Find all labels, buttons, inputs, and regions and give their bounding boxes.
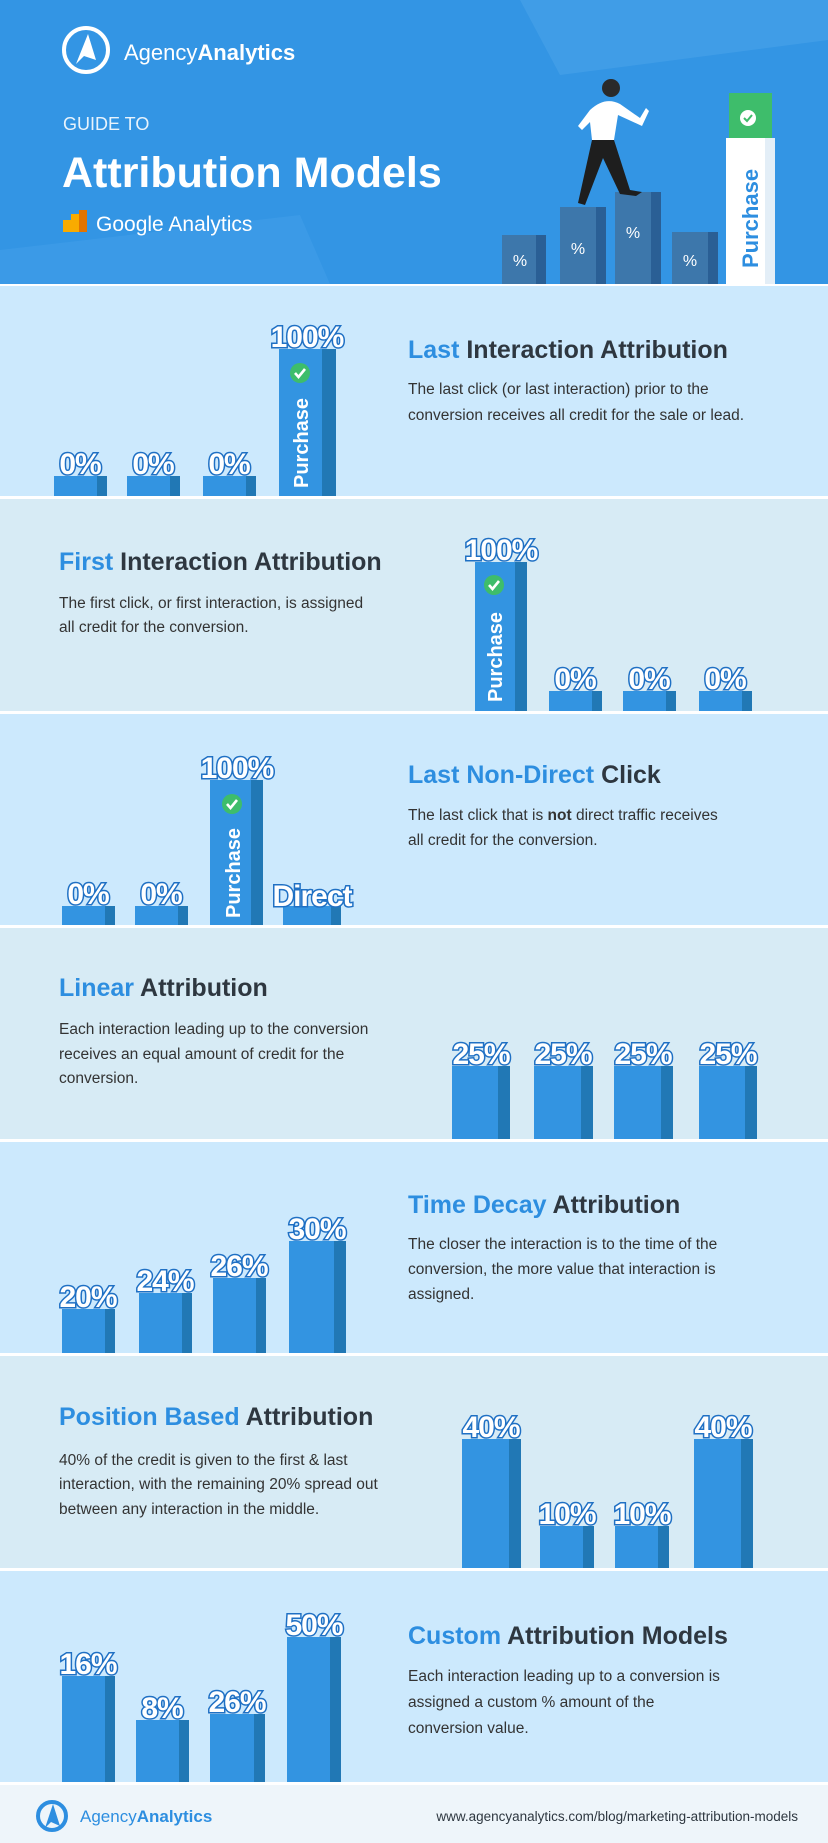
google analytics: Google Analytics: [96, 213, 252, 236]
section 2: first interaction: First Interaction Attribution: [59, 548, 382, 576]
header steps illustration: %: [626, 225, 640, 242]
guide to: GUIDE TO: [63, 114, 149, 134]
section 1: last interaction: 0%: [132, 448, 174, 481]
section 3: last non-direct: all credit for the conversion.: [408, 832, 598, 849]
section 2: first interaction: 100%: [465, 534, 538, 567]
section 6: position based: between any interaction in the middle.: [59, 1501, 319, 1518]
logo: AgencyAnalytics: [124, 40, 295, 65]
logo: [64, 28, 295, 72]
section 5: time decay: 20%: [59, 1281, 117, 1314]
title: Attribution Models: [62, 149, 442, 197]
section 1: last interaction: 100%: [271, 321, 344, 354]
header steps illustration: Purchase: [738, 169, 763, 268]
title: Last Interaction Attribution: [408, 336, 728, 364]
section 2: first interaction: 0%: [628, 663, 670, 696]
header steps illustration: %: [683, 253, 697, 270]
section 7: custom: 50%: [285, 1609, 343, 1642]
section 6: position based: 10%: [538, 1498, 596, 1531]
footer: [0, 1785, 828, 1843]
section 4: linear: receives an equal amount of credit for the: [59, 1046, 344, 1063]
section 2: first interaction: 0%: [704, 663, 746, 696]
section 1: last interaction: 0%: [59, 448, 101, 481]
section 4: linear: conversion.: [59, 1070, 138, 1087]
section 1: last interaction: 0%: [208, 448, 250, 481]
section 4: linear: Each interaction leading up to the conversion: [59, 1021, 368, 1038]
footer: www.agencyanalytics.com/blog/marketing-attribution-models: [435, 1809, 798, 1824]
person: [602, 79, 620, 97]
section 2: first interaction: The first click, or first interaction, is assigned: [59, 595, 363, 612]
section 7: custom: assigned a custom % amount of the: [408, 1694, 654, 1711]
header steps illustration: [502, 79, 775, 284]
section 5: time decay: 24%: [136, 1265, 194, 1298]
section 6: position based: Position Based Attribution: [59, 1403, 373, 1431]
section 1: last interaction: conversion receives all credit for the sale or lead.: [408, 407, 744, 424]
section 1: last interaction: Purchase: [291, 398, 313, 488]
section 2: first interaction: 0%: [554, 663, 596, 696]
section 3: last non-direct: The last click that is not direct traffic receives: [408, 807, 718, 824]
section 6: position based: 40%: [462, 1411, 520, 1444]
section 3: last non-direct: [0, 714, 828, 925]
section 4: linear: 25%: [614, 1038, 672, 1071]
section 4: linear: Linear Attribution: [59, 974, 268, 1002]
section 5: time decay: 26%: [210, 1250, 268, 1283]
header: [0, 0, 828, 284]
section 3: last non-direct: Purchase: [223, 828, 245, 918]
section 7: custom: conversion value.: [408, 1720, 529, 1737]
section 2: first interaction: Purchase: [485, 612, 507, 702]
section 5: time decay: The closer the interaction is to the time of the: [408, 1236, 717, 1253]
section 6: position based: interaction, with the remaining 20% spread out: [59, 1476, 378, 1493]
section 3: last non-direct: Direct: [272, 880, 353, 913]
section 3: last non-direct: 0%: [140, 878, 182, 911]
section 5: time decay: conversion, the more value that interaction is: [408, 1261, 716, 1278]
section 7: custom: Each interaction leading up to a conversion is: [408, 1668, 720, 1685]
footer: AgencyAnalytics: [80, 1807, 212, 1826]
section 7: custom: 26%: [208, 1686, 266, 1719]
section 7: custom: [0, 1571, 828, 1782]
section 4: linear: 25%: [699, 1038, 757, 1071]
header steps illustration: %: [571, 241, 585, 258]
section 5: time decay: assigned.: [408, 1286, 474, 1303]
section 4: linear: 25%: [452, 1038, 510, 1071]
section 6: position based: 40% of the credit is given to the first & last: [59, 1452, 348, 1469]
body: The last click (or last interaction) prior to the: [408, 381, 709, 398]
section 1: last interaction: [0, 286, 828, 496]
section 2: first interaction: all credit for the conversion.: [59, 619, 249, 636]
section 4: linear: 25%: [534, 1038, 592, 1071]
section 2: first interaction: [0, 499, 828, 711]
section 7: custom: 8%: [141, 1692, 183, 1725]
section 6: position based: 10%: [613, 1498, 671, 1531]
section 6: position based: 40%: [694, 1411, 752, 1444]
section 3: last non-direct: 100%: [201, 752, 274, 785]
section 3: last non-direct: Last Non-Direct Click: [408, 761, 661, 789]
section 3: last non-direct: 0%: [67, 878, 109, 911]
section 5: time decay: Time Decay Attribution: [408, 1191, 680, 1219]
header steps illustration: %: [513, 253, 527, 270]
section 6: position based: [0, 1356, 828, 1568]
section 4: linear: [0, 928, 828, 1139]
section 7: custom: 16%: [59, 1648, 117, 1681]
section 5: time decay: 30%: [288, 1213, 346, 1246]
section 7: custom: Custom Attribution Models: [408, 1622, 728, 1650]
section 5: time decay: [0, 1142, 828, 1353]
